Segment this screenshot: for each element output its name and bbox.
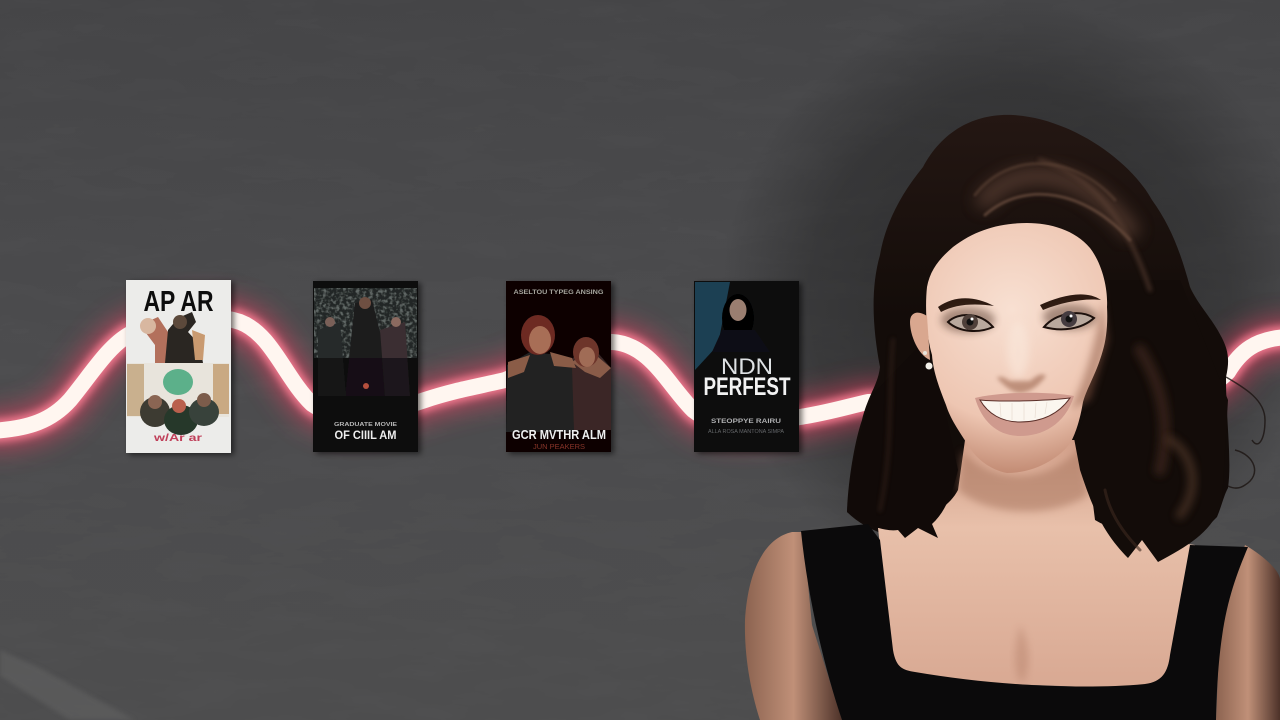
poster 4 title line two: PERFEST [704,373,790,401]
woman: hair back [847,115,1229,562]
poster 1 title: AP AR [144,286,214,318]
poster 2: dark crowd poster [313,281,418,452]
woman: left eye [941,307,995,333]
woman: left arm [745,532,842,720]
woman: hair highlights [880,160,1192,550]
woman: right arm [1216,545,1280,720]
poster 4 portrait [695,282,770,370]
woman: smile [975,393,1074,436]
woman: left eyebrow [938,298,994,312]
woman: cleavage shading [1015,625,1029,684]
woman: front hair lock left [847,340,958,538]
woman: right eye [1043,304,1097,330]
poster 3: two characters on black [506,281,611,452]
poster 4: dark teal poster with title [694,281,799,452]
portrait of smiling woman [745,115,1280,720]
poster 1 upper figures [140,312,205,363]
woman: face [926,223,1107,473]
woman: neck shadow [958,445,1088,511]
poster 2 crowd image [314,288,417,396]
poster 3 subtitle: JUN PEAKERS [533,444,585,451]
poster 3 characters [506,315,611,432]
woman: black dress [801,524,1248,720]
poster 3 title: GCR MVTHR ALM [512,427,606,442]
poster 1 lower figures [140,393,219,435]
poster 1 cardboard panel [127,363,229,417]
poster 1: light poster with cast [126,280,231,453]
poster 4 caption: STEOPPYE RAIRU [711,418,781,425]
poster 4 fine print: ALLA ROSA MANTONA SIMPA [708,429,785,435]
neon light line [0,317,1280,431]
poster 2 small caption: GRADUATE MOVIE [334,422,397,428]
poster 1 caption: w/Ar ar [153,433,202,444]
poster 3 top caption: ASELTOU TYPEG ANSING [514,290,604,296]
poster 2 title: OF CIIIL AM [334,428,396,442]
woman: right eyebrow [1040,294,1101,310]
woman: cheek and nose shading [997,300,1108,410]
woman: ear and earring [910,313,932,370]
woman: neck and chest [878,440,1195,690]
woman: thin stray hair curls [1226,377,1265,488]
poster 4 title line one: NDN [721,354,773,379]
woman: front hair lock right [1074,280,1228,562]
